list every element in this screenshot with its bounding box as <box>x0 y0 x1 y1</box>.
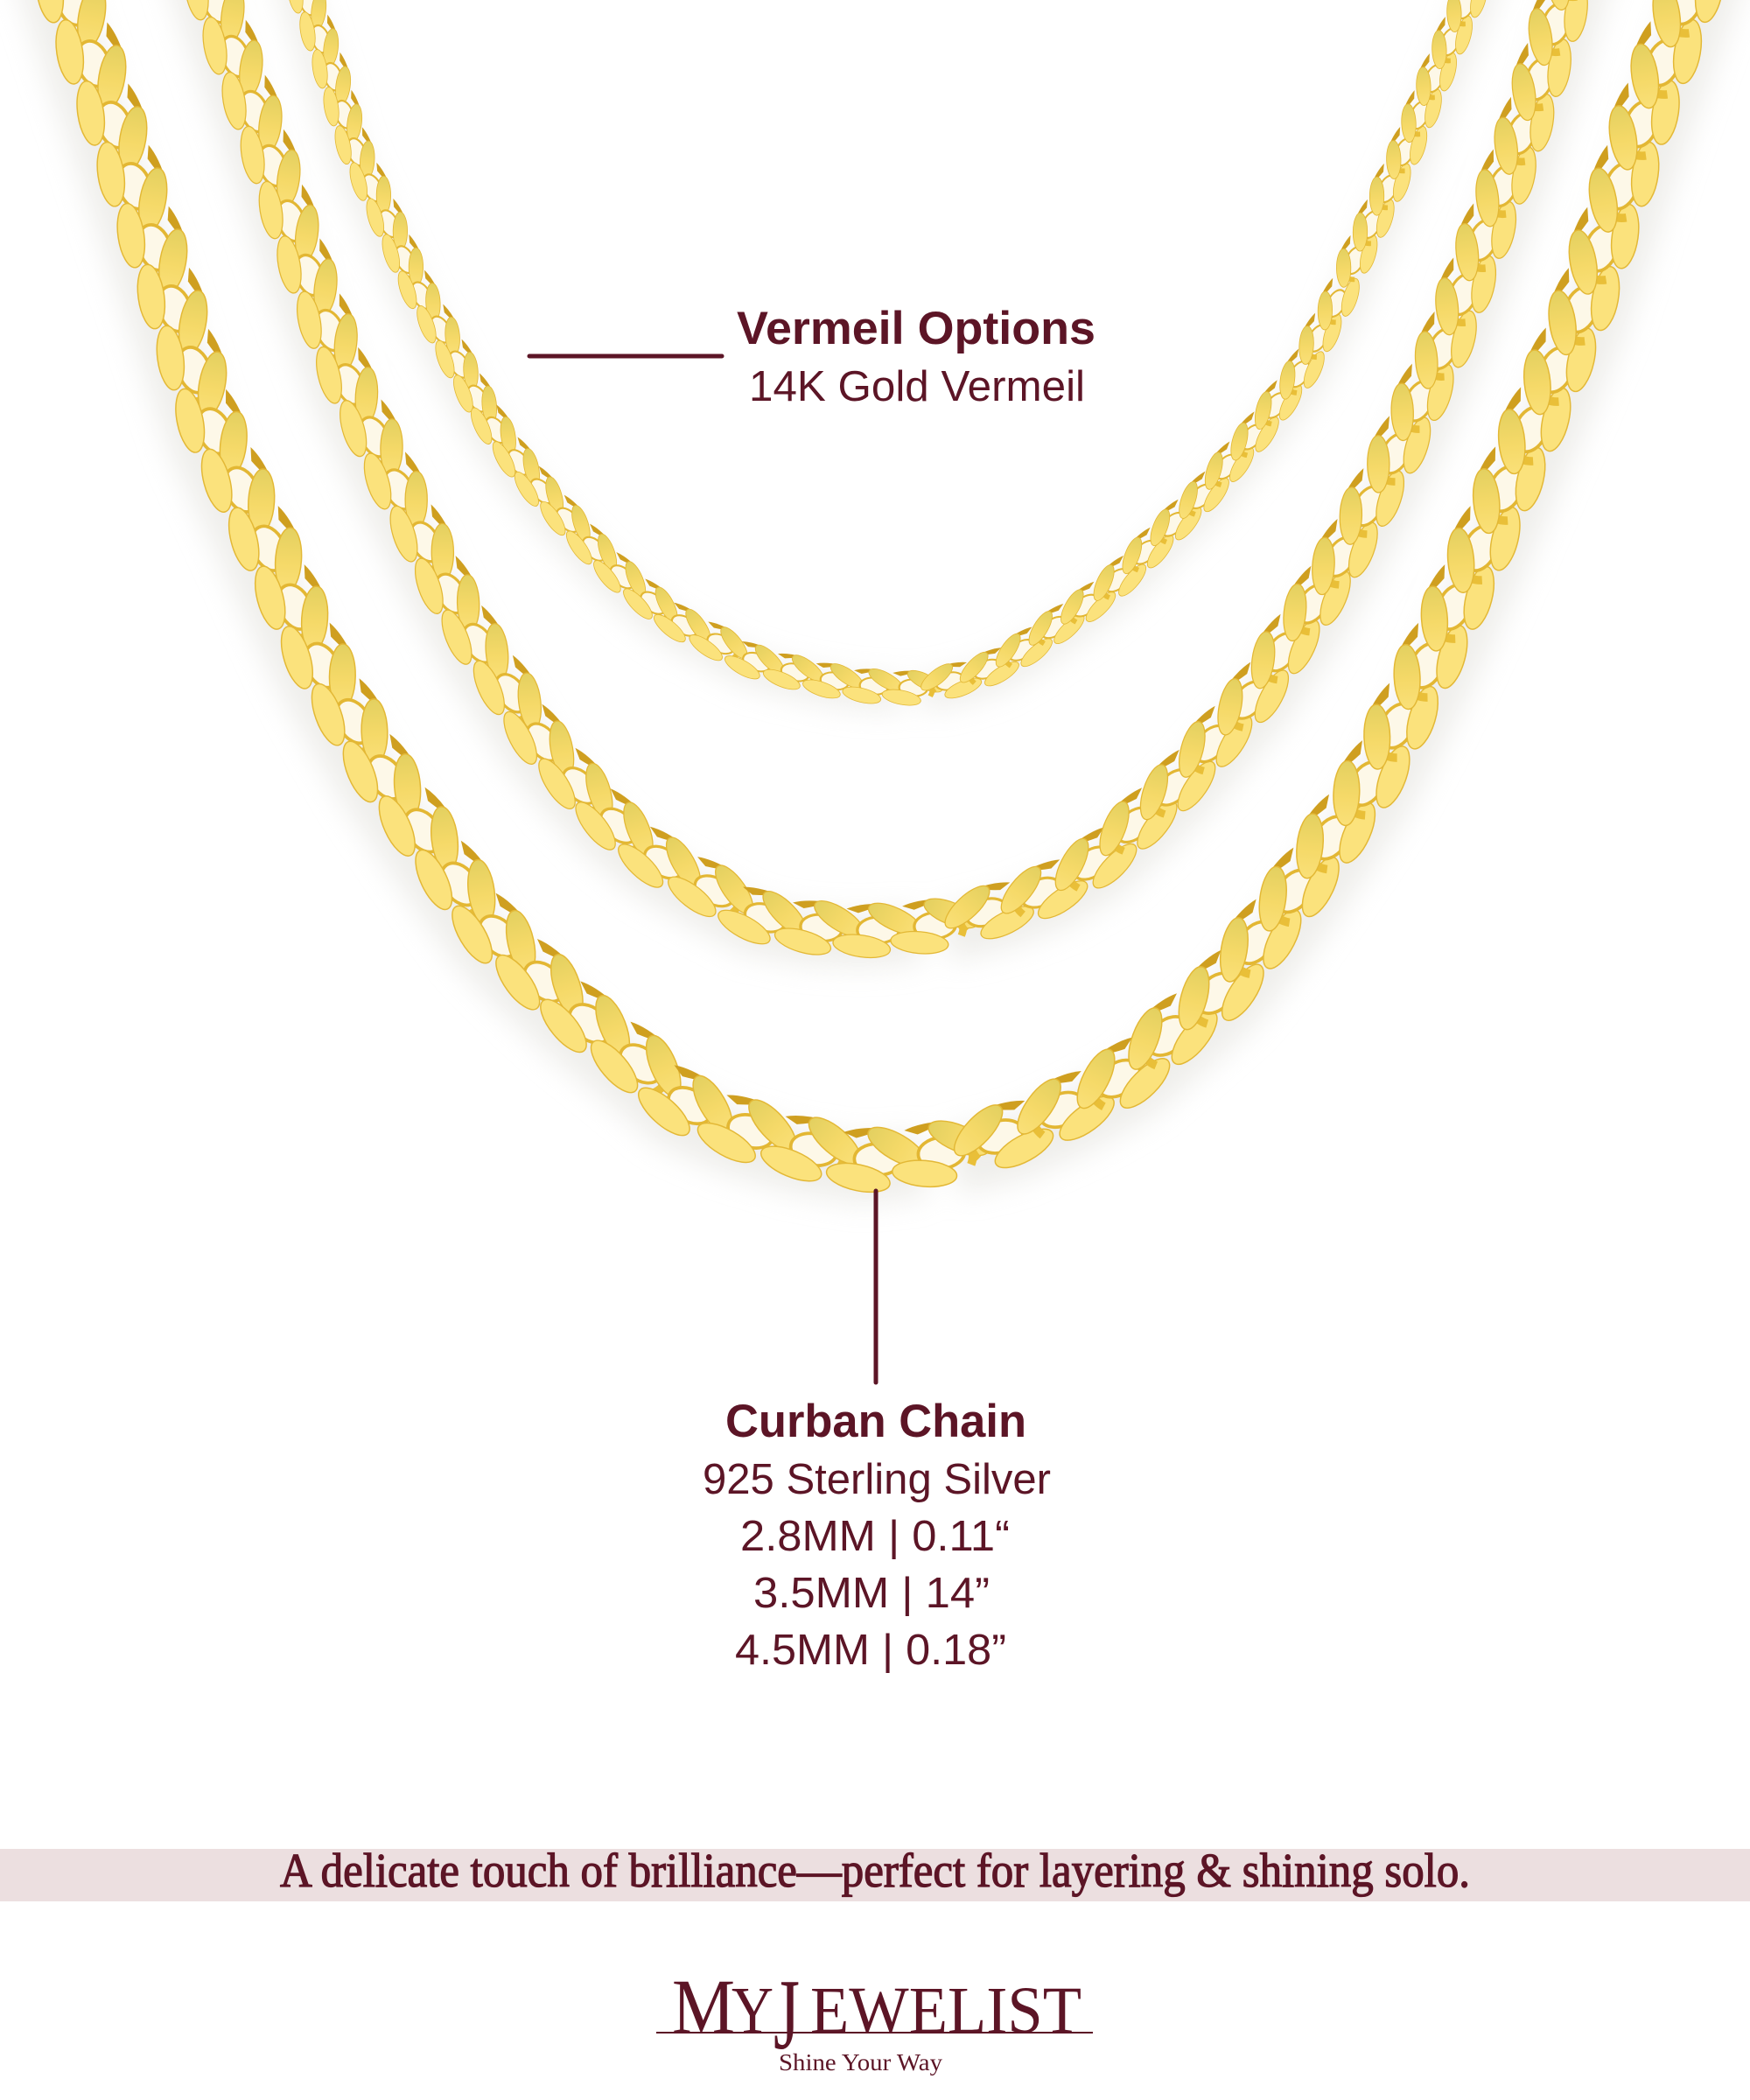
leader line to thick chain <box>873 1191 878 1382</box>
callout: vermeil options <box>529 303 1096 410</box>
heading: Curban Chain: Curban Chain <box>725 1396 1026 1447</box>
logo wordmark EWELIST: EWELIST <box>810 1974 1082 2048</box>
logo wordmark Y: Y <box>732 1974 774 2048</box>
logo: MyJewelist <box>656 1959 1093 2076</box>
chain: thin 2.8mm vermeil curb necklace <box>296 0 1481 688</box>
callout: curban chain specifications <box>703 1191 1051 1674</box>
text: size 2.8mm: 2.8MM | 0.11“ <box>740 1513 1010 1560</box>
logo wordmark J: J <box>774 1959 800 2070</box>
tagline text: A delicate touch of brilliance—perfect for layering & shining solo. <box>280 1844 1470 1897</box>
tagline band <box>0 1844 1750 1901</box>
chain: thick 4.5mm vermeil curb necklace <box>52 0 1708 1159</box>
logo underline <box>656 2032 1093 2034</box>
logo wordmark M: M <box>672 1964 735 2050</box>
heading: Vermeil Options: Vermeil Options <box>737 303 1096 354</box>
text: size 3.5mm: 3.5MM | 14” <box>753 1570 990 1617</box>
text: size 4.5mm: 4.5MM | 0.18” <box>735 1627 1006 1674</box>
logo tagline: Shine Your Way <box>779 2049 943 2076</box>
text: material: 925 Sterling Silver <box>703 1456 1051 1503</box>
text: 14K Gold Vermeil: 14K Gold Vermeil <box>749 363 1085 410</box>
leader line to thin chain <box>529 354 722 359</box>
chain: medium 3.5mm vermeil curb necklace <box>198 0 1592 930</box>
